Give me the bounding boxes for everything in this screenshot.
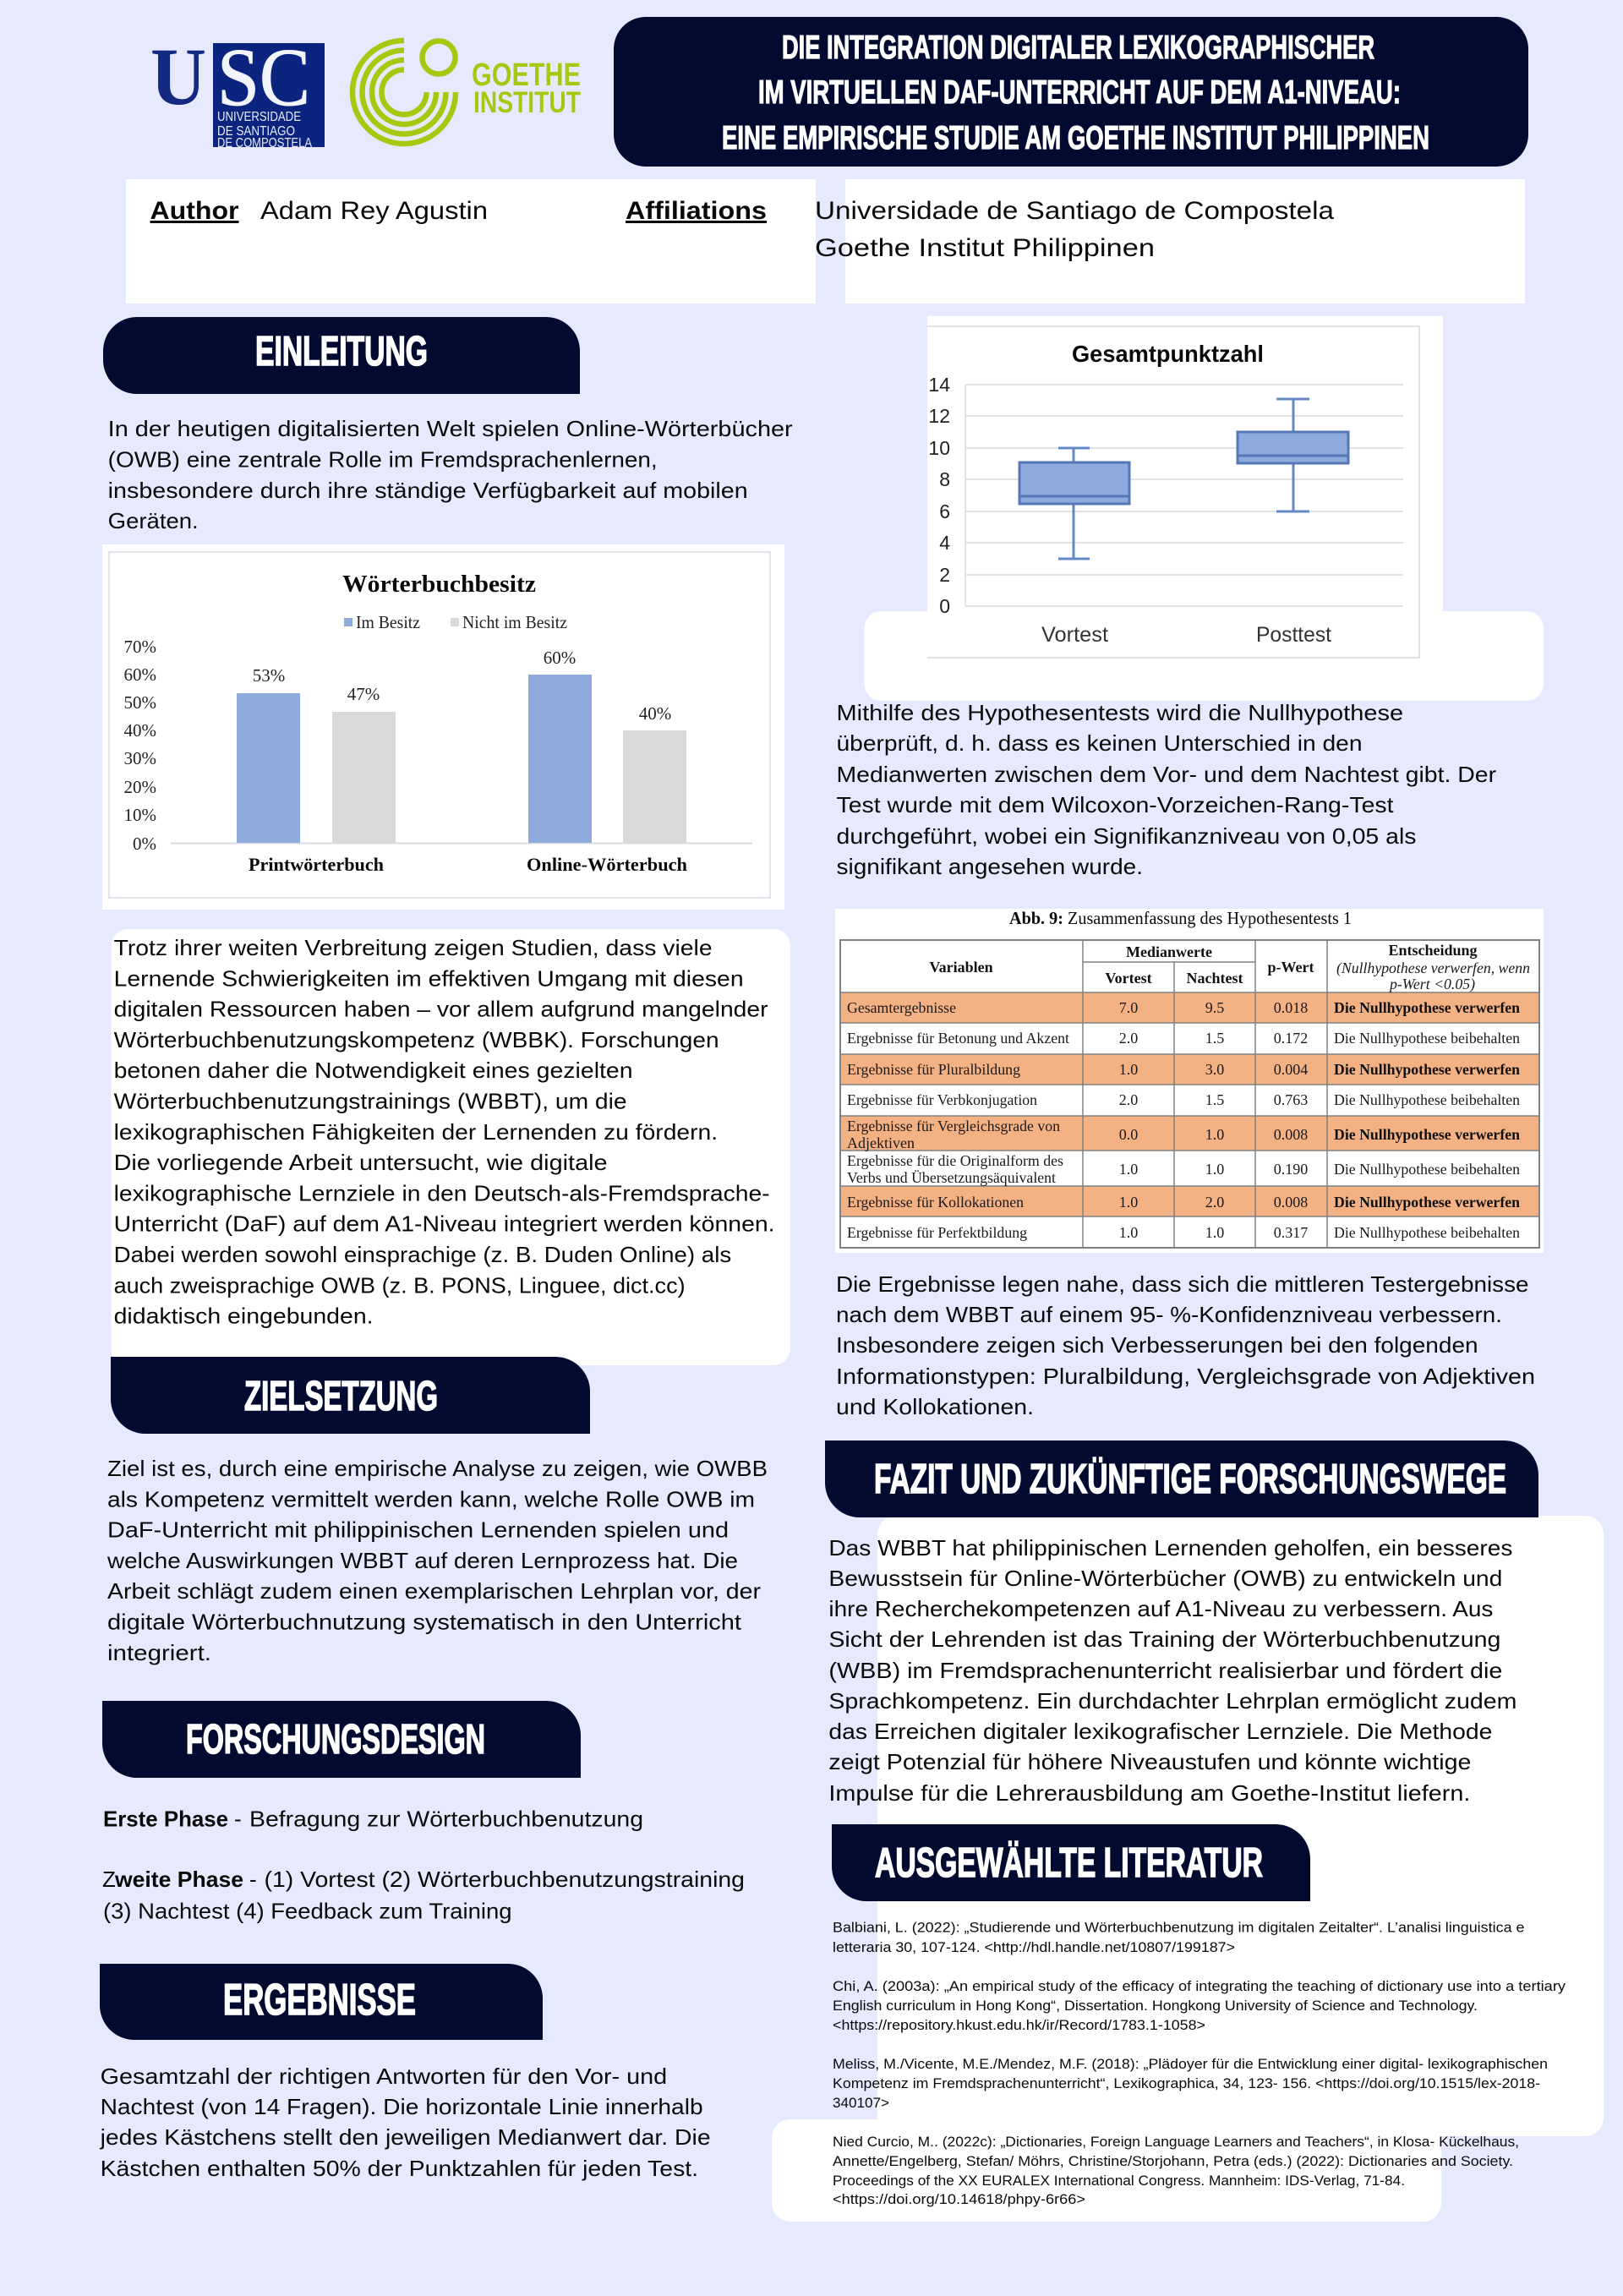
table rows: 2.0 — [1205, 1194, 1224, 1211]
panel: Fazit and Literatur background — [772, 1516, 1604, 2222]
heading: Einleitung: EINLEITUNG — [255, 329, 428, 374]
box plot: Gesamtpunktzahl: Vortest — [1041, 623, 1108, 647]
table rows: 1.0 — [1119, 1224, 1138, 1241]
text block: references: Meliss, M./Vicente, M.E./Mendez, M.F. (2018): „Plädoyer für die Entwicklung einer digital- lexikographischen — [833, 2057, 1548, 2072]
table header: Variablen — [929, 959, 993, 976]
heading: Zielsetzung — [111, 1357, 590, 1434]
text block: Hypothesentest: signifikant angesehen wurde. — [837, 854, 1143, 879]
text block: references: Chi, A. (2003a): „An empirical study of the efficacy of integrating the teaching of dictionary use into a tertiary — [833, 1979, 1566, 1994]
bar chart: Wörterbuchbesitz: 30% — [123, 748, 156, 768]
table rows: Die Nullhypothese beibehalten — [1334, 1224, 1520, 1241]
bar chart: Wörterbuchbesitz: Im Besitz — [356, 612, 420, 632]
text block: Fazit: Sprachkompetenz. Ein durchdachter Lehrplan ermöglicht zudem — [828, 1688, 1516, 1714]
heading: Einleitung — [103, 317, 580, 394]
text block: Zielsetzung: integriert. — [107, 1640, 211, 1665]
logo: Goethe-Institut — [352, 41, 581, 144]
text block: Hypothesentest — [837, 700, 1496, 879]
text block: references: Annette/Engelberg, Stefan/ Möhrs, Christine/Storjohann, Petra (eds.) (2022): Dictionaries and Society. — [833, 2154, 1513, 2169]
heading: Fazit und zukünftige Forschungswege — [825, 1440, 1538, 1517]
text block: Ergebnisse: Gesamtzahl der richtigen Antworten für den Vor- und — [101, 2064, 667, 2089]
text block: references: Kompetenz im Fremdsprachenunterricht“, Lexikographica, 34, 123- 156. <https://doi.org/10.1515/lex-2018- — [833, 2076, 1540, 2091]
title banner — [614, 17, 1528, 167]
text block: Hypothesentest: Medianwerten zwischen dem Vor- und dem Nachtest gibt. Der — [837, 762, 1496, 787]
text block: Fazit: Impulse für die Lehrerausbildung am Goethe-Institut liefern. — [828, 1780, 1470, 1806]
table rows: 0.172 — [1274, 1030, 1308, 1047]
panel: Einleitung main text: didaktisch eingebunden. — [114, 1304, 374, 1329]
text block: Einleitung intro: (OWB) eine zentrale Rolle im Fremdsprachenlernen, — [108, 446, 658, 472]
table rows: Gesamtergebnisse — [847, 999, 956, 1016]
logo: Universidade de Santiago de Compostela: DE SANTIAGO — [217, 124, 295, 139]
table orange rows — [840, 992, 1539, 1216]
table rows: Ergebnisse für die Originalform des — [847, 1152, 1063, 1169]
panel: Einleitung main text: lexikographischen Fähigkeiten der Lernenden zu fördern. — [114, 1119, 718, 1145]
table rows: 0.763 — [1274, 1091, 1308, 1108]
text block: Forschungsdesign phases — [102, 1806, 745, 1924]
box plot: Gesamtpunktzahl: 2 — [939, 564, 950, 586]
table header: (Nullhypothese verwerfen, wenn — [1336, 959, 1530, 977]
table header: Nachtest — [1187, 970, 1243, 987]
table rows: 0.008 — [1274, 1194, 1308, 1211]
text block: Hypothesentest: durchgeführt, wobei ein Signifikanzniveau von 0,05 als — [837, 823, 1417, 849]
panel: author and affiliations: Universidade de Santiago de Compostela — [815, 197, 1334, 225]
panel: Einleitung main text: Lernende Schwierigkeiten im effektiven Umgang mit diesen — [114, 965, 744, 991]
panel: author and affiliations: Adam Rey Agustin — [260, 197, 488, 225]
text block: Ergebnis-Interpretation: nach dem WBBT auf einem 95- %-Konfidenzniveau verbessern. — [836, 1302, 1502, 1327]
table rows: 2.0 — [1119, 1030, 1138, 1047]
table rows: Adjektiven — [847, 1134, 915, 1151]
table rows: 0.190 — [1274, 1161, 1308, 1178]
text block: Ergebnisse — [100, 2064, 711, 2181]
table rows: 1.0 — [1119, 1061, 1138, 1078]
table rows: Die Nullhypothese verwerfen — [1334, 1126, 1520, 1143]
text block: Fazit: Das WBBT hat philippinischen Lernenden geholfen, ein besseres — [828, 1535, 1512, 1561]
table rows: 0.317 — [1274, 1224, 1308, 1241]
box plot: Gesamtpunktzahl: Posttest — [1256, 623, 1331, 647]
box plot: Gesamtpunktzahl: 6 — [939, 500, 950, 522]
bar chart: Wörterbuchbesitz: Wörterbuchbesitz — [342, 571, 536, 598]
panel: Einleitung main text: Dabei werden sowohl einsprachige (z. B. Duden Online) als — [114, 1242, 731, 1267]
logo: Goethe-Institut: GOETHE — [472, 57, 581, 93]
table rows: 1.5 — [1205, 1091, 1224, 1108]
table rows: Ergebnisse für Pluralbildung — [847, 1061, 1020, 1078]
bar chart: Wörterbuchbesitz: 0% — [133, 834, 156, 854]
table rows: Die Nullhypothese beibehalten — [1334, 1030, 1520, 1047]
table header: Medianwerte — [1126, 943, 1212, 960]
bar chart: Wörterbuchbesitz: 47% — [347, 684, 380, 704]
text block: Fazit: ihre Recherchekompetenzen auf A1-Niveau zu verbessern. Aus — [828, 1596, 1493, 1621]
panel: Einleitung main text: digitalen Ressourcen haben – vor allem aufgrund mangelnder — [114, 997, 768, 1022]
table rows: Ergebnisse für Vergleichsgrade von — [847, 1118, 1060, 1134]
text block: Einleitung intro: In der heutigen digitalisierten Welt spielen Online-Wörterbücher — [108, 416, 793, 441]
bar chart: Wörterbuchbesitz: 10% — [123, 805, 156, 825]
text block: Hypothesentest: Test wurde mit dem Wilcoxon-Vorzeichen-Rang-Test — [837, 792, 1394, 817]
panel: Einleitung main text: Die vorliegende Arbeit untersucht, wie digitale — [114, 1150, 608, 1175]
text block: Fazit: zeigt Potenzial für höhere Niveaustufen und könnte wichtige — [828, 1749, 1471, 1774]
table rows: 1.0 — [1205, 1161, 1224, 1178]
table rows: Die Nullhypothese beibehalten — [1334, 1091, 1520, 1108]
text block: references: English curriculum in Hong Kong“, Dissertation. Hongkong University of Science and Technology. — [833, 1998, 1478, 2014]
text block: Forschungsdesign phases: Befragung zur Wörterbuchbenutzung — [249, 1806, 643, 1831]
text block: Zielsetzung: Ziel ist es, durch eine empirische Analyse zu zeigen, wie OWBB — [107, 1456, 768, 1481]
table rows: 7.0 — [1119, 999, 1138, 1016]
bar chart: Wörterbuchbesitz: 50% — [123, 692, 156, 713]
text block: references: letteraria 30, 107-124. <http://hdl.handle.net/10807/199187> — [833, 1940, 1235, 1955]
box plot: Gesamtpunktzahl: 14 — [928, 374, 950, 396]
table rows: 1.0 — [1205, 1224, 1224, 1241]
bar chart: Wörterbuchbesitz: Online-Wörterbuch — [527, 854, 687, 875]
panel: Einleitung main text: Wörterbuchbenutzungstrainings (WBBT), um die — [114, 1089, 627, 1114]
table header: p-Wert <0.05) — [1388, 976, 1475, 993]
table rows: Die Nullhypothese verwerfen — [1334, 999, 1520, 1016]
logo: Universidade de Santiago de Compostela: SC — [217, 32, 310, 123]
table rows: 0.004 — [1274, 1061, 1308, 1078]
panel: Einleitung main text: auch zweisprachige OWB (z. B. PONS, Linguee, dict.cc) — [114, 1272, 686, 1298]
table rows: 3.0 — [1205, 1061, 1224, 1078]
text block: references: Proceedings of the XX EURALEX International Congress. Mannheim: IDS-Verlag, 71-84. — [833, 2173, 1405, 2189]
panel: Einleitung main text: betonen daher die Notwendigkeit eines gezielten — [114, 1058, 633, 1083]
text block: Forschungsdesign phases: - — [234, 1806, 242, 1831]
text block: references — [833, 1921, 1566, 2207]
table header: Vortest — [1105, 970, 1152, 987]
table rows: 0.018 — [1274, 999, 1308, 1016]
box plot: Gesamtpunktzahl: 4 — [939, 532, 950, 554]
table rows: 0.008 — [1274, 1126, 1308, 1143]
text block: Forschungsdesign phases: - — [249, 1867, 257, 1892]
panel: Einleitung main text: lexikographische Lernziele in den Deutsch-als-Fremdsprache- — [114, 1180, 770, 1205]
table rows: Die Nullhypothese verwerfen — [1334, 1061, 1520, 1078]
table rows: Die Nullhypothese verwerfen — [1334, 1194, 1520, 1211]
table rows: Ergebnisse für Perfektbildung — [847, 1224, 1027, 1241]
text block: Einleitung intro — [108, 416, 793, 533]
text block: Forschungsdesign phases: Erste Phase — [103, 1806, 228, 1831]
heading: Zielsetzung: ZIELSETZUNG — [244, 1374, 438, 1419]
bar chart: Wörterbuchbesitz: 53% — [253, 665, 285, 686]
box plot: Gesamtpunktzahl: 8 — [939, 468, 950, 490]
text block: Ergebnis-Interpretation: und Kollokationen. — [836, 1394, 1034, 1419]
panel: Einleitung main text — [112, 929, 790, 1365]
bar chart: Wörterbuchbesitz: 40% — [639, 703, 671, 724]
table rows: Ergebnisse für Kollokationen — [847, 1194, 1024, 1211]
text block: Forschungsdesign phases: weite Phase — [114, 1867, 243, 1892]
box plot: Gesamtpunktzahl: Gesamtpunktzahl — [1072, 341, 1264, 367]
heading: Ausgewählte Literatur: AUSGEWÄHLTE LITERATUR — [875, 1840, 1263, 1886]
text block: Forschungsdesign phases: Z — [102, 1867, 116, 1892]
heading: Ergebnisse — [100, 1964, 543, 2040]
panel: author and affiliations: Goethe Institut Philippinen — [815, 234, 1155, 262]
bar chart: Wörterbuchbesitz: 20% — [123, 777, 156, 797]
logo: Universidade de Santiago de Compostela: UNIVERSIDADE — [217, 110, 301, 124]
heading: Ausgewählte Literatur — [832, 1824, 1310, 1901]
table rows: Ergebnisse für Verbkonjugation — [847, 1091, 1037, 1108]
text block: Ergebnis-Interpretation: Informationstypen: Pluralbildung, Vergleichsgrade von Adjektiven — [836, 1364, 1535, 1389]
text block: Forschungsdesign phases: (1) Vortest (2) Wörterbuchbenutzungstraining — [264, 1867, 745, 1892]
logo: Universidade de Santiago de Compostela: U — [150, 31, 206, 122]
table rows: 2.0 — [1119, 1091, 1138, 1108]
heading: Ergebnisse: ERGEBNISSE — [223, 1976, 416, 2025]
text block: Ergebnis-Interpretation: Insbesondere zeigen sich Verbesserungen bei den folgenden — [836, 1332, 1478, 1358]
bar chart: Wörterbuchbesitz: 40% — [123, 720, 156, 741]
text block: Zielsetzung — [107, 1456, 768, 1665]
text block: Hypothesentest: überprüft, d. h. dass es keinen Unterschied in den — [837, 730, 1363, 756]
text block: references: <https://repository.hkust.edu.hk/ir/Record/1783.1-1058> — [833, 2018, 1205, 2033]
text block: Fazit: (WBB) im Fremdsprachenunterricht realisierbar und fördert die — [828, 1658, 1502, 1683]
panel: author and affiliations: Affiliations — [626, 197, 767, 225]
heading: Forschungsdesign: FORSCHUNGSDESIGN — [186, 1717, 485, 1763]
table rows — [847, 999, 1520, 1241]
text block: Einleitung intro: Geräten. — [108, 508, 199, 533]
table rows: 0.0 — [1119, 1126, 1138, 1143]
text block: Forschungsdesign phases: (3) Nachtest (4) Feedback zum Training — [103, 1899, 512, 1924]
table: Zusammenfassung des Hypothesentests: Abb. 9: Zusammenfassung des Hypothesentests 1 — [1009, 908, 1352, 928]
text block: Zielsetzung: digitale Wörterbuchnutzung systematisch in den Unterricht — [107, 1610, 742, 1635]
table rows: Die Nullhypothese beibehalten — [1334, 1161, 1520, 1178]
bar chart: Wörterbuchbesitz: 70% — [123, 637, 156, 657]
text block: Ergebnisse: Nachtest (von 14 Fragen). Die horizontale Linie innerhalb — [101, 2094, 703, 2119]
table grid — [840, 940, 1539, 1248]
text block: Ergebnisse: Kästchen enthalten 50% der Punktzahlen für jeden Test. — [101, 2156, 698, 2181]
panel: Einleitung main text: Trotz ihrer weiten Verbreitung zeigen Studien, dass viele — [114, 935, 713, 960]
bar chart: Wörterbuchbesitz: Printwörterbuch — [249, 854, 384, 875]
text block: Zielsetzung: Arbeit schlägt zudem einen exemplarischen Lehrplan vor, der — [107, 1578, 761, 1604]
text block: Ergebnisse: jedes Kästchens stellt den jeweiligen Medianwert dar. Die — [100, 2124, 711, 2150]
bar chart: Wörterbuchbesitz: 60% — [544, 648, 576, 668]
table rows: Ergebnisse für Betonung und Akzent — [847, 1030, 1069, 1047]
text block: Fazit: Sicht der Lehrenden ist das Training der Wörterbuchbenutzung — [828, 1626, 1500, 1652]
text block: Fazit — [828, 1535, 1516, 1806]
bar chart: Wörterbuchbesitz: Nicht im Besitz — [462, 612, 567, 632]
box plot: Gesamtpunktzahl — [864, 316, 1544, 701]
table rows: 1.0 — [1119, 1194, 1138, 1211]
text block: references: Nied Curcio, M.. (2022c): „Dictionaries, Foreign Language Learners and Teachers“, in Klosa- Kückelhaus, — [833, 2135, 1519, 2150]
panel: author and affiliations: Author — [150, 197, 239, 225]
logo: Goethe-Institut: INSTITUT — [473, 86, 581, 119]
table header: Entscheidung — [1388, 942, 1478, 959]
heading: Forschungsdesign — [102, 1701, 581, 1778]
table header — [929, 942, 1530, 993]
text block: Hypothesentest: Mithilfe des Hypothesentests wird die Nullhypothese — [837, 700, 1403, 725]
text block: Fazit: Bewusstsein für Online-Wörterbücher (OWB) zu entwickeln und — [828, 1566, 1502, 1591]
logo: Universidade de Santiago de Compostela: DE COMPOSTELA — [217, 136, 312, 150]
table: Zusammenfassung des Hypothesentests — [835, 908, 1544, 1253]
text block: references: 340107> — [833, 2096, 889, 2111]
text block: Zielsetzung: DaF-Unterricht mit philippinischen Lernenden spielen und — [107, 1517, 729, 1543]
table rows: 9.5 — [1205, 999, 1224, 1016]
table rows: Verbs und Übersetzungsäquivalent — [847, 1169, 1056, 1186]
panel: Einleitung main text: Unterricht (DaF) auf dem A1-Niveau integriert werden können. — [114, 1211, 775, 1237]
text block: Einleitung intro: insbesondere durch ihre ständige Verfügbarkeit auf mobilen — [108, 478, 748, 503]
logo: Universidade de Santiago de Compostela — [150, 31, 325, 150]
text block: Ergebnis-Interpretation — [836, 1271, 1535, 1419]
text block: Zielsetzung: als Kompetenz vermittelt werden kann, welche Rolle OWB im — [107, 1486, 755, 1512]
box plot: Gesamtpunktzahl: 0 — [939, 595, 950, 617]
panel: author and affiliations — [126, 179, 1525, 303]
table rows: 1.0 — [1119, 1161, 1138, 1178]
text block: Fazit: das Erreichen digitaler lexikografischer Lernziele. Die Methode — [828, 1719, 1492, 1744]
text block: references: Balbiani, L. (2022): „Studierende und Wörterbuchbenutzung im digitalen Zeitalter“. L’analisi linguistica e — [833, 1921, 1525, 1936]
text block: references: <https://doi.org/10.14618/phpy-6r66> — [833, 2192, 1085, 2207]
box plot: Gesamtpunktzahl: 10 — [928, 437, 950, 459]
bar chart: Wörterbuchbesitz — [102, 544, 784, 910]
text block: Zielsetzung: welche Auswirkungen WBBT auf deren Lernprozess hat. Die — [107, 1548, 738, 1573]
table rows: 1.5 — [1205, 1030, 1224, 1047]
box plot: Gesamtpunktzahl: 12 — [928, 405, 950, 427]
text block: Ergebnis-Interpretation: Die Ergebnisse legen nahe, dass sich die mittleren Testergebnisse — [836, 1271, 1528, 1297]
table rows: 1.0 — [1205, 1126, 1224, 1143]
table header: p-Wert — [1268, 959, 1314, 976]
bar chart: Wörterbuchbesitz: 60% — [123, 664, 156, 685]
panel: Einleitung main text: Wörterbuchbenutzungskompetenz (WBBK). Forschungen — [114, 1027, 719, 1052]
title banner: DIE INTEGRATION DIGITALER LEXIKOGRAPHISCHER — [782, 30, 1374, 66]
